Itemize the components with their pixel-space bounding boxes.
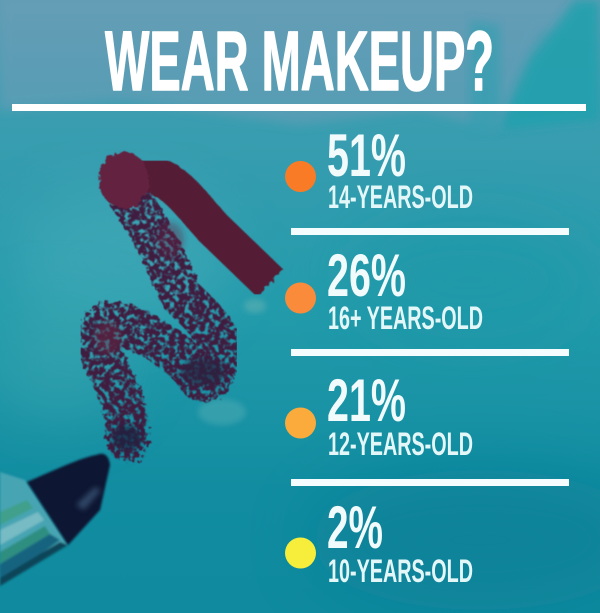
lipstick tube: [0, 472, 68, 586]
age label: 12-YEARS-OLD: [328, 426, 473, 462]
dot: [285, 538, 316, 568]
title rule: [12, 104, 586, 111]
dark ink patches: [94, 222, 225, 451]
dot: [285, 282, 316, 314]
divider: [291, 479, 569, 486]
row: 12-year-olds: [285, 367, 473, 462]
dot: [285, 408, 316, 438]
percentage: 2%: [327, 494, 383, 561]
dot: [285, 161, 316, 192]
textured scribble stroke: [99, 190, 219, 440]
lipstick: [0, 454, 110, 586]
divider: [291, 228, 569, 235]
row: 16+ year-olds: [285, 242, 483, 336]
bullet highlight: [76, 487, 101, 510]
row: 14-year-olds: [285, 122, 473, 215]
age label: 16+ YEARS-OLD: [328, 300, 483, 336]
percentage: 21%: [327, 367, 406, 434]
solid scribble stroke: [128, 172, 270, 283]
percentage: 51%: [327, 122, 406, 189]
lipstick bullet: [27, 454, 110, 545]
percentage: 26%: [327, 242, 406, 309]
divider: [291, 349, 569, 356]
age label: 10-YEARS-OLD: [328, 553, 473, 589]
row: 10-year-olds: [285, 494, 473, 589]
lipstick scribble: [94, 152, 270, 451]
age label: 14-YEARS-OLD: [328, 179, 473, 215]
scribble top blob: [99, 152, 149, 208]
